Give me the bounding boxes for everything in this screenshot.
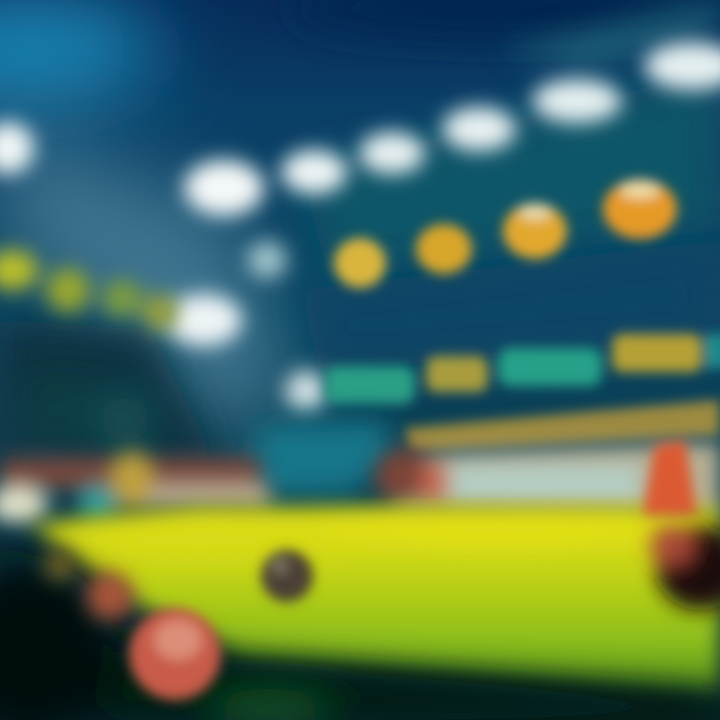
foreground dark shadow xyxy=(0,550,720,720)
small foreground balls xyxy=(44,549,134,620)
right banner strip xyxy=(325,334,720,404)
golden stand roof xyxy=(405,400,720,452)
row of yellow lamps xyxy=(334,179,677,288)
left banner strip xyxy=(0,250,178,330)
foreground red ball xyxy=(129,608,221,700)
player in orange xyxy=(643,440,697,515)
lower stand and crowd xyxy=(0,442,720,523)
ball on pitch xyxy=(261,550,313,602)
left stand: dark crowd xyxy=(0,320,220,470)
teal structure behind the goal xyxy=(245,420,395,495)
pitch xyxy=(30,508,720,690)
foreground right ball xyxy=(650,525,720,610)
row of white floodlights xyxy=(0,42,720,412)
